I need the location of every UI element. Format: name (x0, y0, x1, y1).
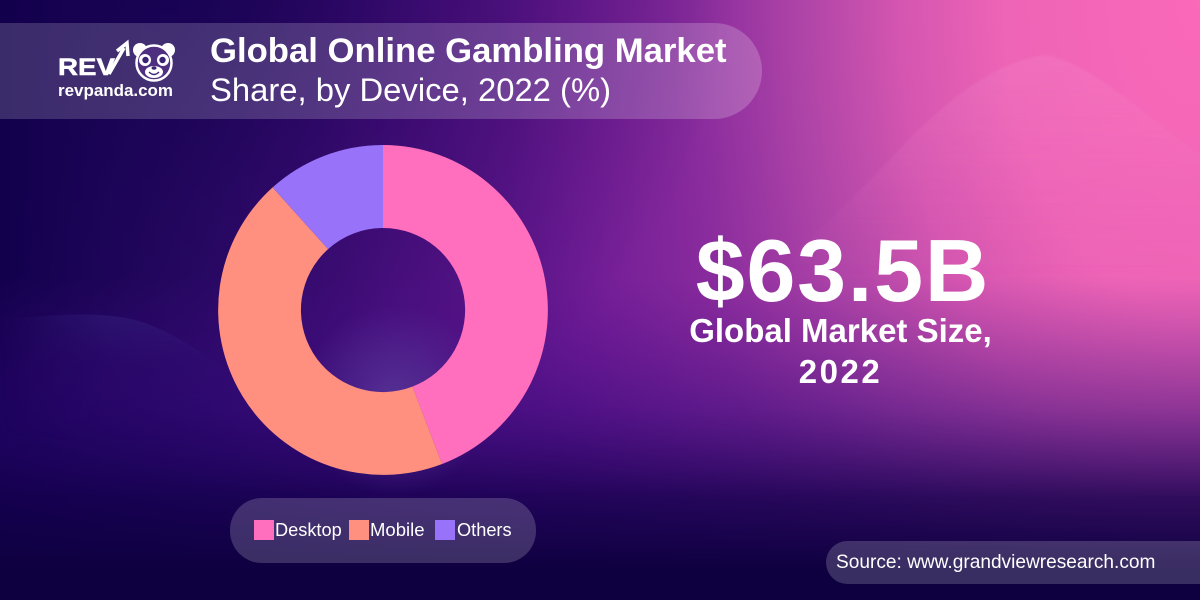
legend item: mobile: Mobile (370, 519, 424, 540)
header banner (0, 23, 762, 119)
legend (230, 498, 536, 563)
title (210, 32, 727, 108)
source note (826, 541, 1200, 584)
donut chart (218, 145, 548, 475)
logo panda face (133, 43, 175, 80)
slice: mobile (218, 187, 442, 475)
slice: others (273, 145, 383, 249)
logo: revpanda (58, 40, 175, 100)
legend item: others: Others (457, 520, 512, 540)
logo url: revpanda.com (58, 82, 173, 100)
slice: desktop (383, 145, 548, 464)
value label: Global Market Size, (689, 312, 992, 349)
value: $63.5B (696, 221, 990, 320)
market size callout (689, 221, 992, 390)
legend item: desktop: Desktop (275, 520, 342, 540)
source note: Source: www.grandviewresearch.com (836, 552, 1155, 573)
value label (689, 312, 992, 390)
title: Global Online Gambling Market (210, 32, 727, 70)
value label: 2022 (799, 353, 882, 390)
logo arrow (109, 43, 128, 74)
logo wordmark: REV (58, 54, 115, 81)
title: Share, by Device, 2022 (%) (210, 71, 611, 108)
